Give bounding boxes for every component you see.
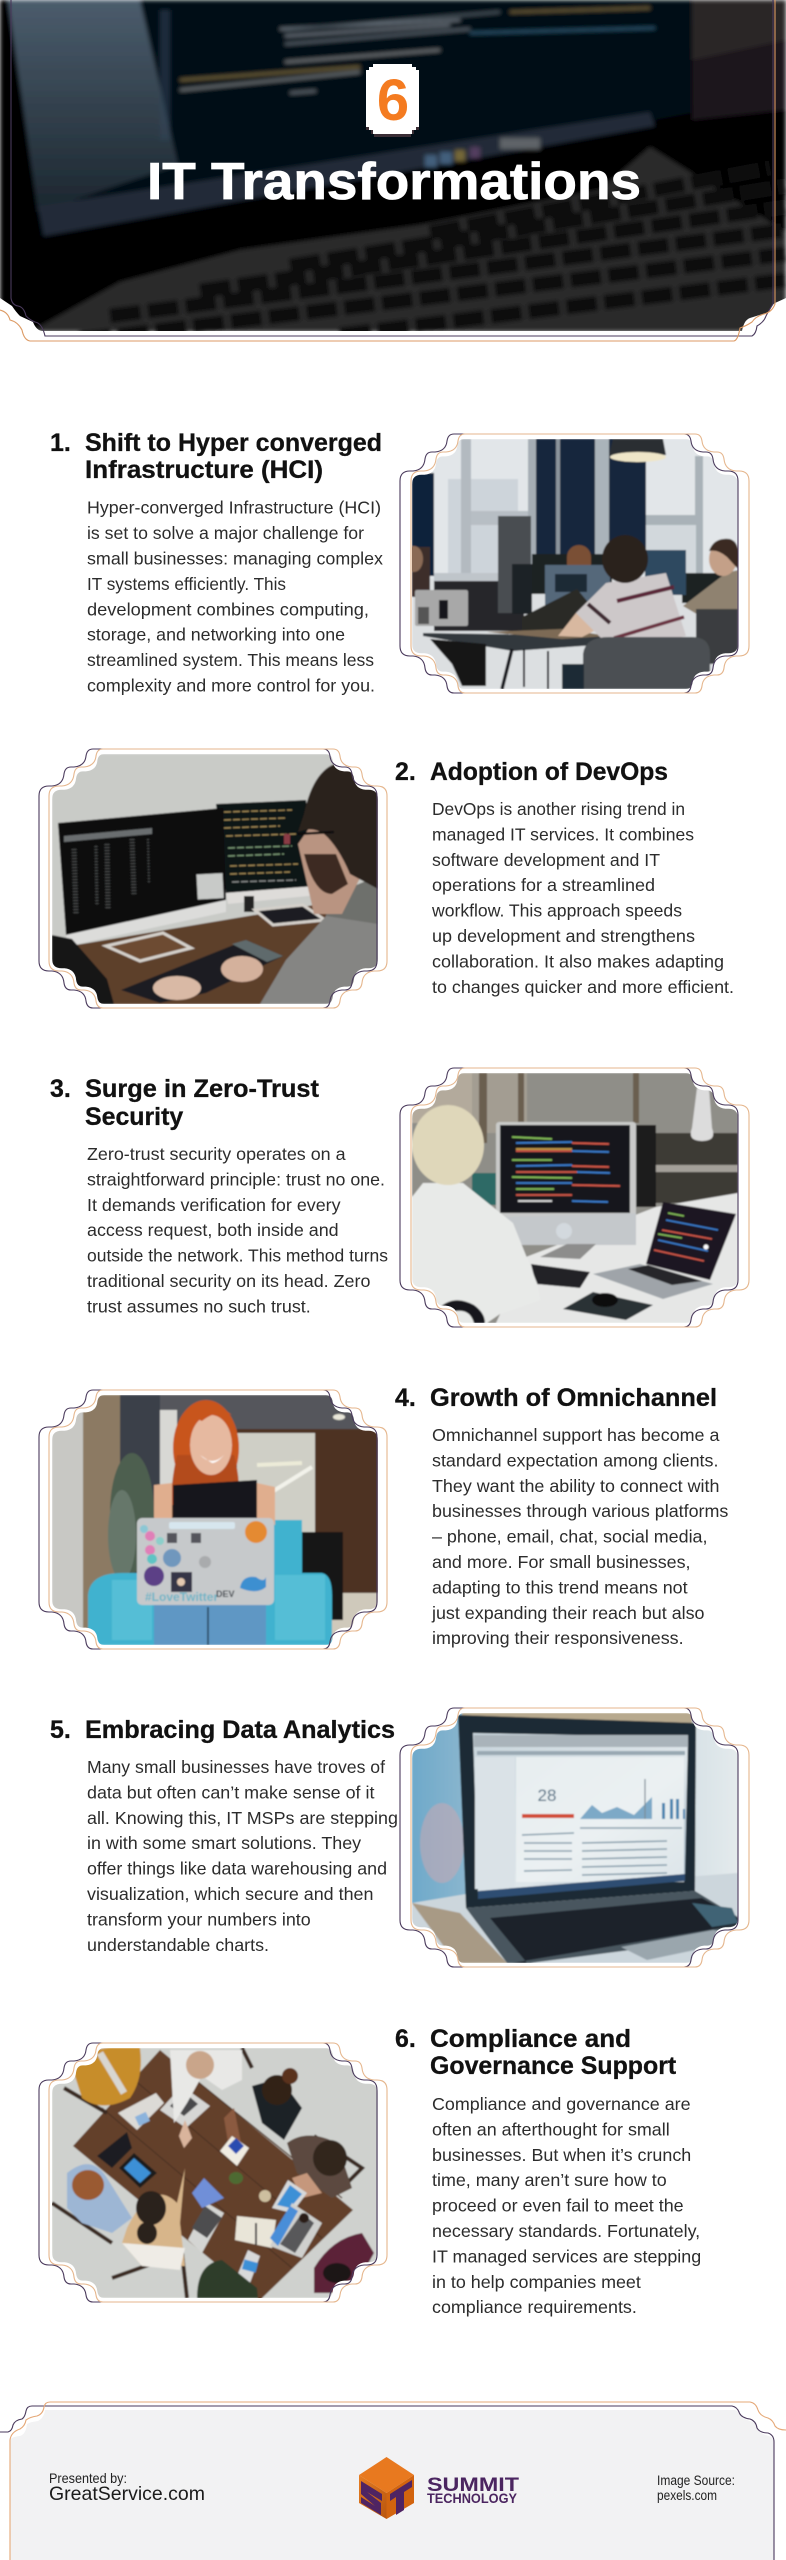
logo cube [359,2457,414,2519]
header banner [0,0,786,341]
section 4: omnichannel [39,1384,728,1649]
badge plate [366,64,419,134]
body text 6: IT managed services are stepping [432,2246,701,2266]
body text 6: necessary standards. Fortunately, [432,2221,700,2241]
body text 4: just expanding their reach but also [431,1603,705,1623]
body text 3: Zero-trust security operates on a [87,1144,346,1164]
presented by: Presented by: [49,2470,127,2486]
photo 6: team around a table seen from above [39,2043,387,2302]
heading 2: Adoption of DevOps [430,758,668,786]
summit technology logo [359,2457,519,2519]
body text 2: DevOps is another rising trend in [432,799,685,819]
body text 3: straightforward principle: trust no one. [87,1169,385,1189]
photo 4: woman with stickered laptop: #LoveTwitter [145,1590,218,1604]
body text 5: all. Knowing this, IT MSPs are stepping [87,1808,398,1828]
body text 5: Many small businesses have troves of [87,1757,385,1777]
heading 3: Surge in Zero-Trust [85,1075,319,1103]
body text 4: standard expectation among clients. [432,1450,718,1470]
section 5: data analytics [50,1708,749,1967]
body text 3: access request, both inside and [87,1220,339,1240]
heading 5: Embracing Data Analytics [85,1716,395,1744]
heading 6: Compliance and [430,2025,631,2053]
body text 1: Hyper-converged Infrastructure (HCI) [87,498,381,518]
footer dark outline [0,2406,774,2560]
footer orange outline [10,2402,786,2560]
badge number: 6 [377,68,409,133]
number badge [366,64,419,137]
photo 2: man coding at two monitors [39,749,387,1008]
header laptop photo [0,0,786,340]
photo 4: woman with stickered laptop: DEV [216,1589,235,1599]
heading 3: 3. [50,1075,71,1103]
section 6: compliance and governance [39,2025,701,2317]
photo 4: woman with stickered laptop [39,1390,387,1649]
body text 1: streamlined system. This means less [87,650,374,670]
heading 6 [395,2025,676,2080]
heading 3 [50,1075,319,1131]
body text 2: up development and strengthens [432,926,695,946]
body text 2: collaboration. It also makes adapting [432,951,724,971]
header dark outline [11,0,773,336]
body text 4: Omnichannel support has become a [432,1425,719,1445]
body text 4: and more. For small businesses, [432,1552,691,1572]
body text 1: is set to solve a major challenge for [87,523,364,543]
body text 2: software development and IT [432,850,660,870]
heading 1 [50,429,382,484]
heading 1: Shift to Hyper converged [85,429,382,457]
photo 3: woman reading code on screens [400,1068,749,1327]
photo 3 outlines [400,1068,749,1327]
body text 3: trust assumes no such trust. [87,1296,311,1316]
logo wordmark: TECHNOLOGY [427,2490,518,2506]
body text 1: development combines computing, [87,599,369,619]
body text 6: businesses. But when it’s crunch [432,2145,691,2165]
body text 1: IT systems efficiently. This [87,574,286,594]
body text 6 [432,2094,701,2317]
presented by [49,2470,205,2505]
heading 3: Security [85,1103,183,1131]
heading 4: 4. [395,1384,416,1412]
body text 4 [431,1425,728,1648]
body text 6: often an afterthought for small [432,2119,670,2139]
logo wordmark: SUMMIT [427,2475,519,2496]
image source: Image Source: [657,2473,735,2488]
body text 2 [431,799,734,997]
body text 6: Compliance and governance are [432,2094,691,2114]
body text 1: small businesses: managing complex [87,548,383,568]
photo 4 outlines [39,1390,387,1649]
body text 6: time, many aren’t sure how to [432,2170,667,2190]
body text 6: proceed or even fail to meet the [432,2196,684,2216]
photo 1 outlines [400,434,749,693]
photo 5 outlines [400,1708,749,1967]
heading 1: 1. [50,429,71,457]
section 3: zero-trust security [50,1068,749,1327]
heading 1: Infrastructure (HCI) [85,456,323,484]
body text 1: storage, and networking into one [87,625,345,645]
body text 5: in with some smart solutions. They [87,1833,361,1853]
photo 2 outlines [39,749,387,1008]
body text 5 [87,1757,398,1955]
body text 4: improving their responsiveness. [432,1628,684,1648]
body text 3 [87,1144,388,1316]
photo 5: laptop showing analytics dashboard: 28 [538,1786,556,1805]
heading 5: 5. [50,1716,71,1744]
badge shadow [366,68,419,137]
photo 1: developers in an office [400,434,749,693]
footer panel [0,2402,786,2560]
heading 6: Governance Support [430,2052,676,2080]
body text 2: workflow. This approach speeds [431,901,682,921]
body text 5: offer things like data warehousing and [87,1859,387,1879]
heading 2: 2. [395,758,416,786]
body text 4: businesses through various platforms [432,1501,728,1521]
presented by: GreatService.com [49,2483,205,2505]
heading 4: Growth of Omnichannel [430,1384,717,1412]
section 2: devops [39,749,734,1008]
header orange outline [0,0,775,341]
body text 4: – phone, email, chat, social media, [432,1527,707,1547]
photo 5: laptop showing analytics dashboard [400,1708,749,1967]
section 1: hyper converged infrastructure [50,429,749,696]
body text 5: understandable charts. [87,1935,269,1955]
image source: pexels.com [657,2488,717,2503]
body text 3: It demands verification for every [87,1195,341,1215]
body text 5: transform your numbers into [87,1909,311,1929]
body text 3: outside the network. This method turns [87,1246,388,1266]
body text 1: complexity and more control for you. [87,676,375,696]
body text 2: operations for a streamlined [432,875,655,895]
body text 5: data but often can’t make sense of it [87,1782,374,1802]
body text 1 [87,498,383,696]
body text 5: visualization, which secure and then [87,1884,373,1904]
body text 2: managed IT services. It combines [432,824,694,844]
body text 6: in to help companies meet [432,2272,641,2292]
body text 3: traditional security on its head. Zero [87,1271,370,1291]
heading 6: 6. [395,2025,416,2053]
title: IT Transformations [147,153,641,211]
photo 6 outlines [39,2043,387,2302]
body text 6: compliance requirements. [432,2297,637,2317]
body text 4: adapting to this trend means not [432,1577,688,1597]
image source [657,2473,735,2503]
body text 4: They want the ability to connect with [432,1476,719,1496]
footer background [10,2410,774,2560]
logo wordmark [427,2475,519,2506]
body text 2: to changes quicker and more efficient. [432,977,734,997]
